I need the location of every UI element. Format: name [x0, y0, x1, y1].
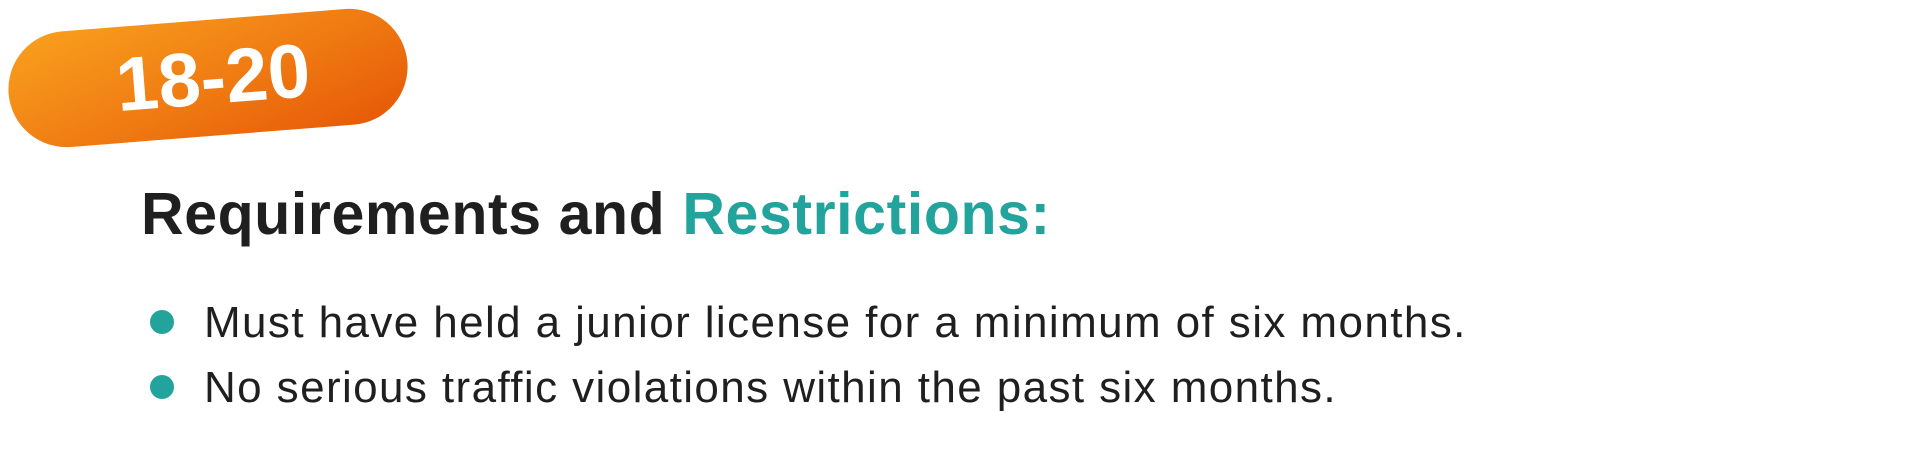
- badge: age 18-20: [4, 4, 412, 152]
- bullet 1: Must have held a junior license for a minimum of six months.: [204, 298, 1467, 347]
- heading: Requirements and Restrictions:: [141, 181, 1051, 247]
- badge: age 18-20: 18-20: [113, 28, 313, 128]
- bullet 2: No serious traffic violations within the past six months.: [204, 363, 1337, 412]
